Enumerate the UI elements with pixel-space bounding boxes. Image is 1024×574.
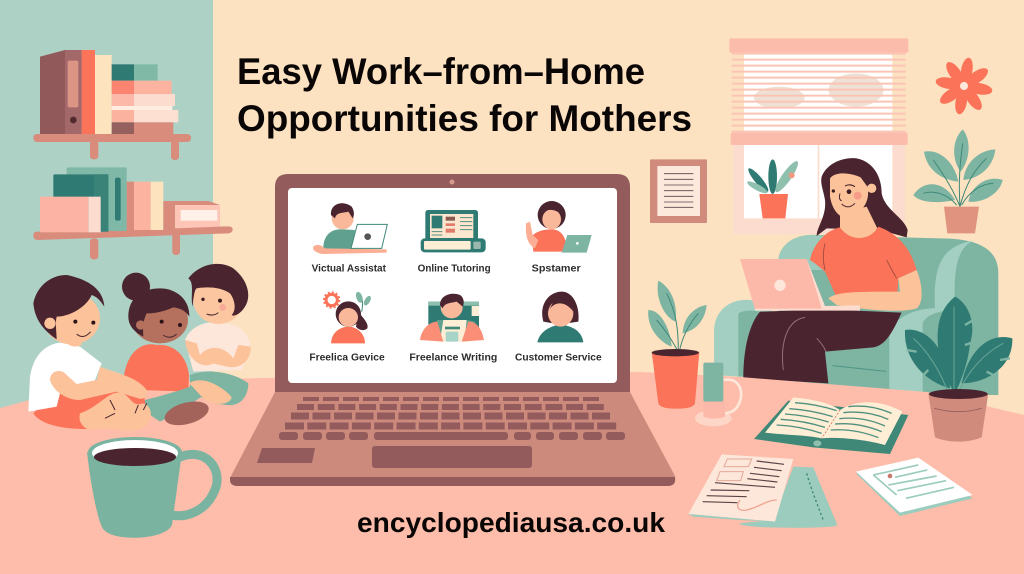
job: Online Tutoring: Online Tutoring <box>418 264 491 275</box>
laptop <box>230 174 675 486</box>
pink floor and table <box>0 372 1024 574</box>
open book <box>754 397 908 454</box>
title <box>237 51 692 139</box>
job: Freelance Service: Freelica Gevice <box>309 352 385 363</box>
icon: wall flower <box>931 53 997 119</box>
wall plant <box>913 129 1003 233</box>
armchair <box>714 235 998 395</box>
upper shelf <box>33 50 191 160</box>
coffee mug <box>87 437 217 538</box>
job: Virtual Assistant: Victual Assistat <box>312 264 387 275</box>
job: Freelance Service <box>309 291 385 363</box>
child: left <box>28 275 151 430</box>
job: Customer Service <box>515 292 602 363</box>
window <box>729 38 908 234</box>
window plant <box>746 159 801 218</box>
job: Spstamer: Spstamer <box>532 264 581 275</box>
laptop base <box>230 392 675 486</box>
lower shelf <box>33 167 233 259</box>
teal wall <box>0 0 213 420</box>
desk papers and book <box>688 397 973 528</box>
job: Freelance Writing <box>409 294 497 363</box>
right room scene <box>650 38 1003 395</box>
mother with laptop <box>740 158 922 383</box>
picture frame <box>650 159 707 223</box>
child: middle <box>122 273 211 429</box>
table scene <box>648 281 1012 442</box>
job: Freelance Writing: Freelance Writing <box>409 352 497 363</box>
left notes <box>688 454 837 528</box>
job: Customer Service: Customer Service <box>515 352 602 363</box>
website url: encyclopediausa.co.uk <box>357 507 665 538</box>
title: Opportunities for Mothers <box>237 98 692 139</box>
job: Spstamer <box>526 201 592 275</box>
screen job options <box>309 201 602 363</box>
bookshelves <box>33 50 233 259</box>
job: Online Tutoring <box>418 210 491 275</box>
right notes <box>856 458 973 516</box>
laptop screen bezel <box>275 174 630 392</box>
large leafy plant <box>905 297 1012 442</box>
child: right <box>185 264 251 405</box>
title: Easy Work–from–Home <box>237 51 645 92</box>
children <box>28 264 251 430</box>
table mug <box>695 363 741 426</box>
job: Virtual Assistant <box>312 203 387 275</box>
left potted plant <box>648 281 707 409</box>
